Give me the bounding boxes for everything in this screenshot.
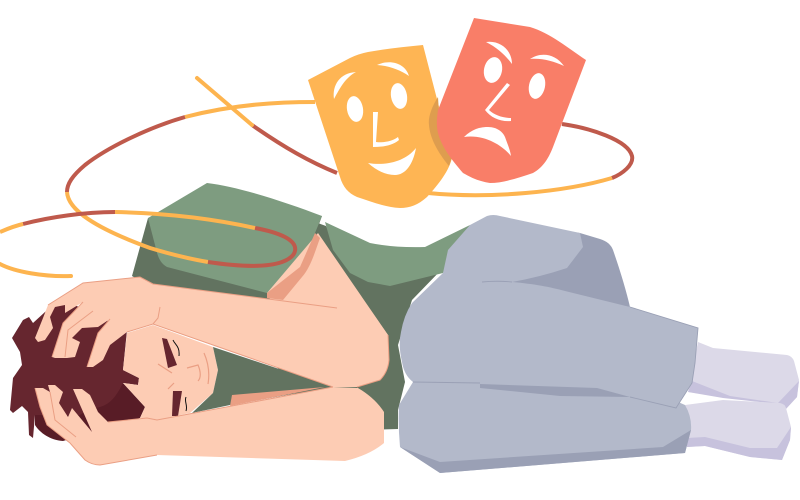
closed eyes: [162, 338, 177, 368]
tragedy mask features: [464, 42, 564, 156]
hair main: [10, 298, 139, 438]
mask overlap shadow: [429, 97, 452, 166]
hair: [10, 298, 145, 441]
face: [123, 325, 218, 420]
upper arm outline: [48, 277, 389, 387]
nose and wrinkles: [158, 353, 209, 389]
lower leg: [399, 382, 691, 473]
rope behind the masks: [185, 102, 632, 195]
trousers: [399, 215, 698, 473]
upper arm and hand: [35, 277, 389, 387]
back thigh shadow: [500, 230, 630, 307]
rope in front of the body: [0, 78, 295, 276]
knee crease shadow: [480, 384, 630, 397]
hair shadow: [35, 383, 145, 441]
upper leg and back thigh: [400, 215, 698, 408]
comedy mask: [308, 45, 452, 208]
tragedy mask: [429, 18, 586, 183]
trouser edge lines: [413, 281, 698, 408]
lower arm outline: [35, 387, 333, 465]
socks: [685, 342, 799, 460]
shoulder and chest skin: [267, 233, 388, 387]
sleeve: [132, 183, 322, 298]
eyelashes: [173, 340, 187, 411]
comedy mask features: [334, 62, 416, 175]
lower leg shading: [400, 430, 691, 473]
lower arm and hand: [35, 385, 384, 465]
shirt torso: [230, 222, 470, 430]
dark shirt gap between arms: [192, 347, 333, 413]
